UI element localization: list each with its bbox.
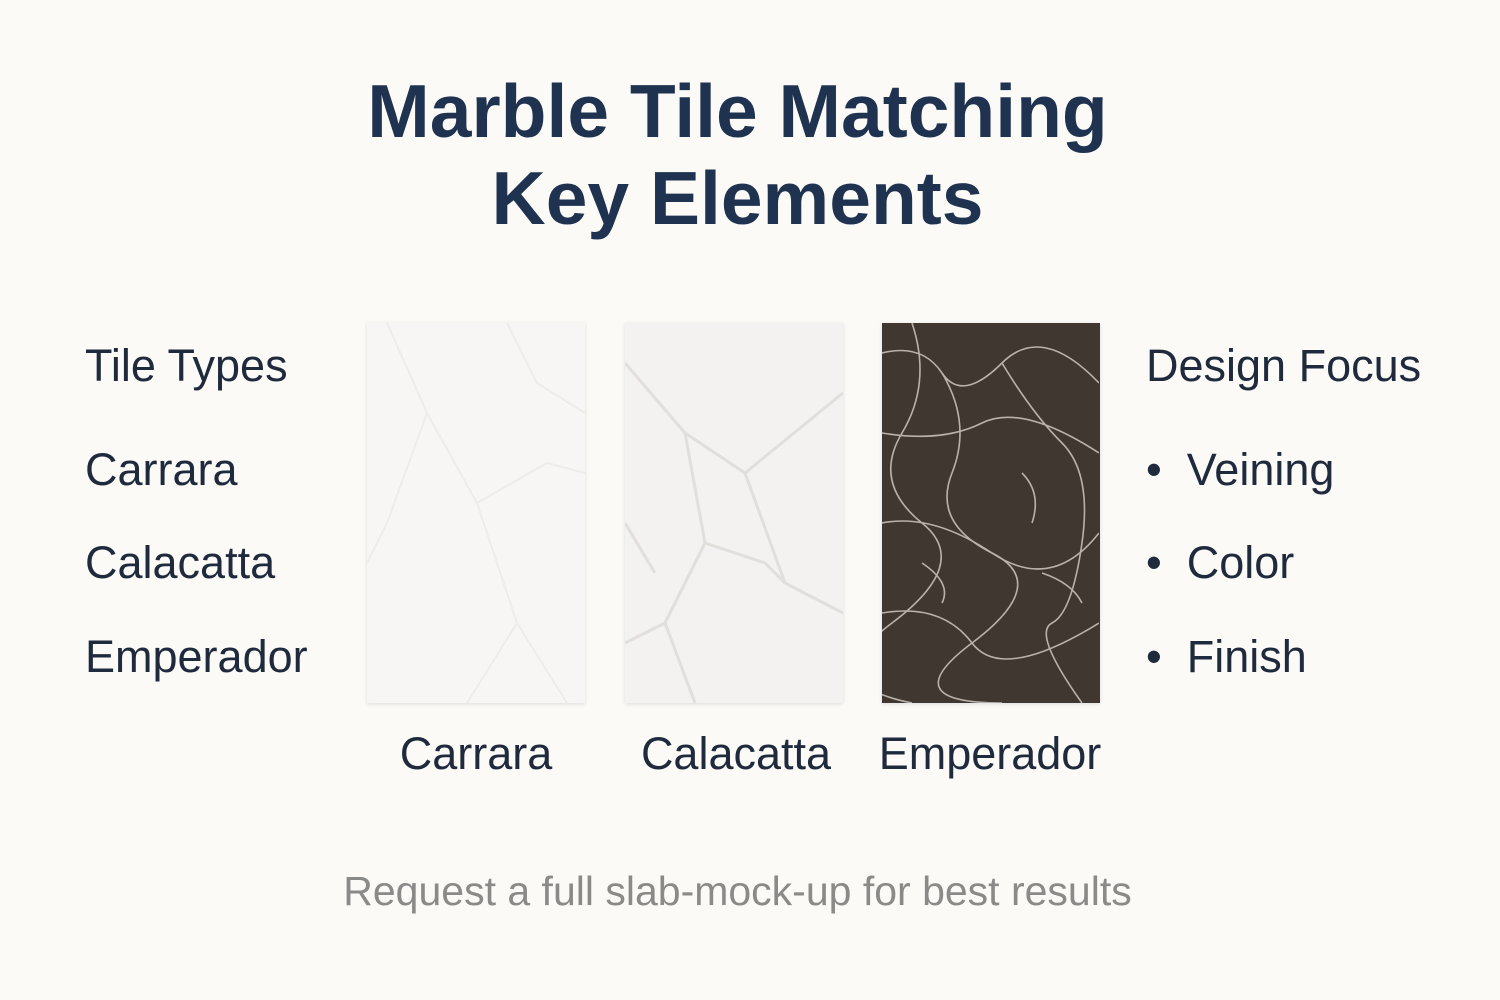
bullet: Color: • Color	[1146, 537, 1294, 588]
panel: design focus	[1146, 340, 1421, 682]
bullet: Finish: • Finish	[1146, 631, 1307, 682]
panel: tile types	[85, 340, 308, 682]
footer note: Request a full slab-mock-up for best results	[343, 868, 1132, 914]
tile: Carrara	[367, 323, 585, 703]
item: Calacatta: Calacatta	[85, 537, 275, 588]
tile: Emperador	[882, 323, 1100, 703]
bullet: Veining: • Veining	[1146, 444, 1334, 495]
title: Key Elements	[492, 156, 983, 240]
item: Emperador: Emperador	[85, 631, 308, 682]
item: Carrara: Carrara	[85, 444, 238, 495]
title: Marble Tile Matching	[367, 69, 1108, 153]
tile: Calacatta	[625, 323, 843, 703]
label: Emperador: Emperador	[879, 728, 1101, 779]
label: Calacatta: Calacatta	[641, 728, 831, 779]
label: Carrara: Carrara	[400, 728, 552, 779]
heading: design focus: Design Focus	[1146, 340, 1421, 391]
title	[367, 69, 1108, 240]
heading: tile types: Tile Types	[85, 340, 288, 391]
